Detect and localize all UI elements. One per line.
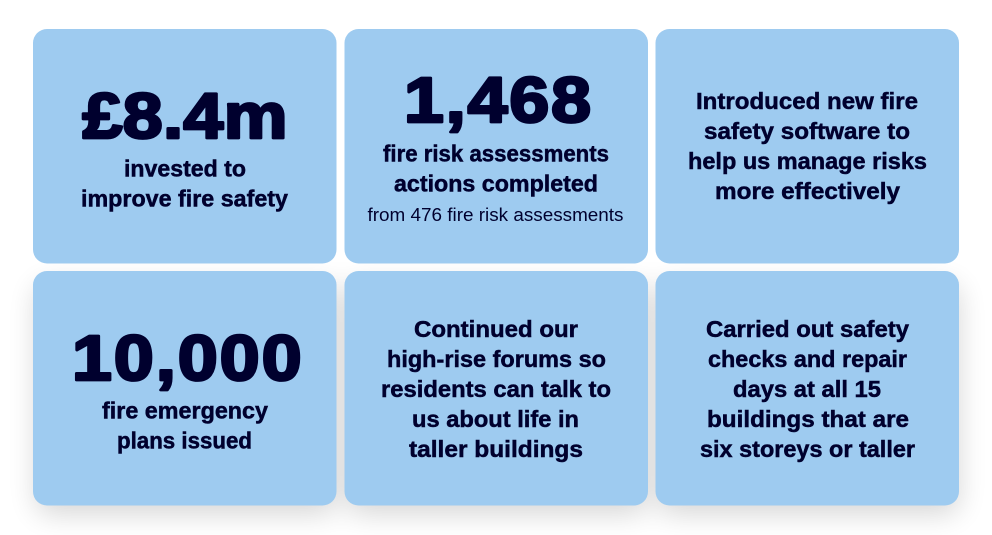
text: invested to improve fire safety: improve fire safety	[81, 186, 288, 212]
text: from 476 fire risk assessments: from 476 fire risk assessments	[368, 205, 624, 225]
text: continued high-rise forums: us about life in	[412, 406, 579, 432]
text: fire emergency plans issued: fire emergency	[102, 398, 268, 424]
text: continued high-rise forums: residents can talk to	[381, 376, 611, 402]
text: fire risk assessments actions completed	[383, 140, 609, 196]
text: introduced new fire safety software: Introduced new fire	[696, 88, 918, 114]
text: introduced new fire safety software: safety software to	[704, 118, 910, 144]
panel: new fire safety software	[656, 29, 959, 264]
text: fire risk assessments actions completed: fire risk assessments	[383, 140, 609, 166]
text: introduced new fire safety software	[688, 88, 927, 204]
text: fire emergency plans issued	[102, 398, 268, 454]
text: carried out safety checks	[700, 316, 915, 462]
stat: 1,468: 1,468	[404, 65, 591, 136]
text: continued high-rise forums: taller buildings	[409, 436, 583, 462]
text: carried out safety checks: Carried out safety	[706, 316, 909, 342]
panel: 1,468 actions completed	[344, 29, 648, 264]
stat: £8.4m: £8.4m	[82, 81, 287, 152]
text: continued high-rise forums	[381, 316, 611, 462]
text: invested to improve fire safety	[81, 156, 288, 212]
stat: 10,000: 10,000	[72, 323, 302, 394]
panel: £8.4m invested	[33, 29, 336, 264]
text: introduced new fire safety software: more effectively	[715, 178, 900, 204]
text: invested to improve fire safety: invested to	[124, 156, 246, 182]
text: introduced new fire safety software: help us manage risks	[688, 148, 927, 174]
text: carried out safety checks: six storeys or taller	[700, 436, 915, 462]
text: continued high-rise forums: Continued our	[414, 316, 578, 342]
text: carried out safety checks: checks and repair	[708, 346, 907, 372]
panel: high-rise forums	[344, 271, 648, 506]
text: carried out safety checks: days at all 15	[733, 376, 881, 402]
text: fire emergency plans issued: plans issued	[117, 428, 252, 454]
text: continued high-rise forums: high-rise forums so	[387, 346, 606, 372]
text: carried out safety checks: buildings that are	[707, 406, 909, 432]
panel: 10,000 fire emergency plans	[33, 271, 336, 506]
panel: safety checks and repair days	[656, 271, 959, 506]
text: fire risk assessments actions completed: actions completed	[394, 170, 598, 196]
